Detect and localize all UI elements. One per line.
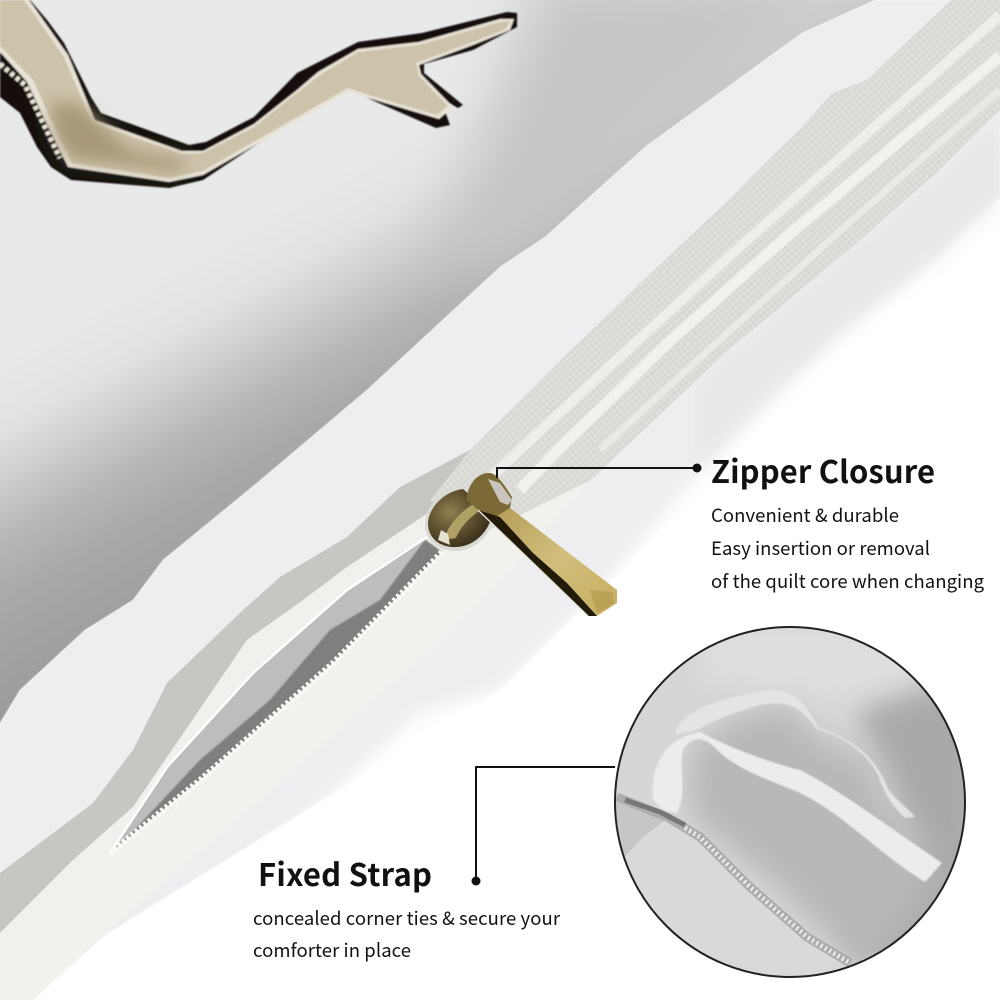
strap: front band [653, 732, 942, 882]
text: fixed strap description: concealed corner ties & secure your [253, 905, 561, 931]
zipper opening: cavity [110, 537, 442, 853]
slider ring [467, 473, 512, 517]
grey inner fold above the zipper [0, 450, 470, 933]
seam [617, 797, 850, 963]
ring window [488, 479, 512, 505]
illustration on duvet: beige figure arm [0, 0, 517, 188]
figure pale rim [0, 0, 514, 182]
heading: Fixed Strap: Fixed Strap [258, 850, 432, 895]
zipper tape, upper section [430, 0, 1000, 545]
figure beige fill [0, 0, 510, 178]
zipper tape, lower lip with teeth [0, 480, 591, 1000]
text: zipper closure description: Convenient & durable [711, 502, 899, 528]
lower white duvet body [133, 120, 1000, 1000]
figure black outline [0, 0, 517, 188]
photo background: shadowed bedding [0, 0, 874, 723]
figure brown shading [50, 100, 185, 172]
circle outline [615, 627, 965, 977]
figure beaded stripe [0, 64, 60, 158]
zipper slider [425, 473, 617, 616]
text: zipper closure description [711, 502, 985, 594]
zipper tape, upper lip of opening [0, 505, 440, 968]
heading: Zipper Closure: Zipper Closure [711, 447, 935, 492]
text: fixed strap description [253, 905, 561, 963]
cavity dark band [110, 540, 442, 853]
zipper pull tab [478, 508, 617, 616]
text: zipper closure description: of the quilt core when changing [711, 568, 985, 594]
leader line: fixed strap [472, 767, 615, 886]
leader line: zipper closure [497, 464, 702, 478]
text: zipper closure description: Easy insertion or removal [711, 535, 930, 561]
text: fixed strap description: comforter in place [253, 937, 411, 963]
detail circle: fixed strap photo [616, 628, 964, 976]
strap: back band [675, 690, 915, 818]
tape ribs [490, 15, 1000, 490]
